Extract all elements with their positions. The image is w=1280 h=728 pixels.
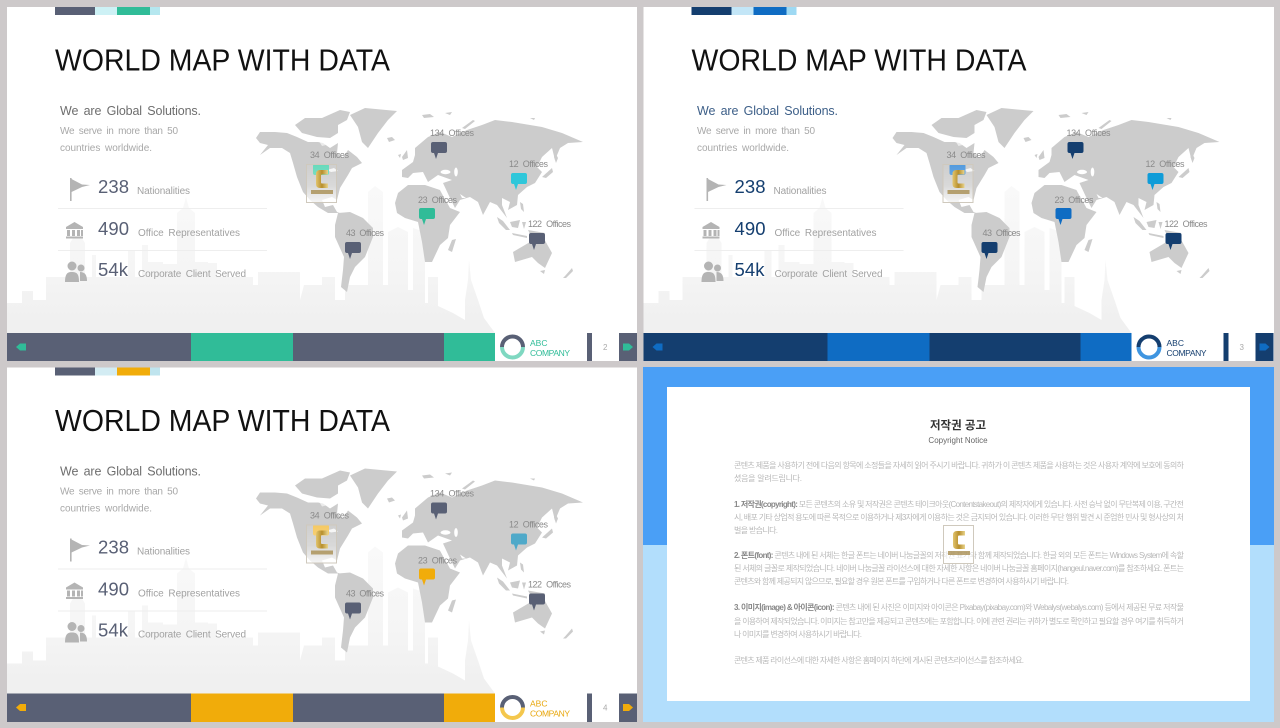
page number: 3 [1240,343,1244,352]
marker: 23 offices: 23 Offices [418,556,458,566]
marker: 12 offices [509,159,548,190]
paragraph 2: font: 콘텐츠와 함께 제공되지 않으므로, 필요할 경우 원본 폰트를 구입하거나 다른 폰트로 변경하여 사용하시기 바랍니다. [734,576,1069,586]
slide 4: copyright notice [643,367,1274,722]
stat: nationalities: Nationalities [137,186,190,197]
stat: office representatives: Office Representatives [774,228,876,239]
marker: 12 offices: 12 Offices [509,520,548,530]
notice heading: Copyright Notice [928,436,988,445]
stat: corporate clients: 54k [734,259,765,280]
footer bar [644,333,1274,361]
stat: office representatives: 490 [734,218,766,239]
company logo: COMPANY [1166,348,1207,358]
intro text: We are Global Solutions. [60,104,201,118]
notice heading: 저작권 공고 [930,418,986,432]
intro text [60,104,201,154]
marker: 43 offices: 43 Offices [346,228,384,238]
marker: 122 offices: 122 Offices [528,580,572,590]
page number: 2 [603,343,608,352]
marker: 34 offices: 34 Offices [310,150,350,160]
company logo [1138,336,1207,358]
stat: nationalities: 238 [98,176,129,197]
marker: 134 offices [430,128,474,159]
stat: office representatives [702,218,876,239]
marker: 134 offices: 134 Offices [430,128,474,138]
marker: 43 offices [982,228,1021,259]
skyline silhouette [644,186,1132,333]
marker: 134 offices: 134 Offices [430,488,474,498]
page number: 4 [603,704,608,712]
footer bar [7,694,637,722]
intro text: We serve in more than 50 [60,486,178,498]
stat: corporate clients: 54k [98,620,129,640]
marker: 12 offices: 12 Offices [1146,159,1185,169]
watermark [306,525,336,563]
paragraph 1: copyright [734,499,1184,535]
watermark [943,164,973,202]
marker: 134 offices [1066,128,1111,159]
stat: nationalities [706,176,826,201]
stat: office representatives: Office Representatives [138,588,240,600]
stat: corporate clients: Corporate Client Served [138,630,246,640]
marker: 23 offices: 23 Offices [1054,195,1094,205]
paragraph 1: copyright: 벌을 받습니다. [734,525,778,535]
paragraph 3: image and icon: 3. 이미지(image) & 아이콘(icon): 콘텐츠 내에 된 사진은 이미지와 아이콘은 Pixabay(pixabay.com)와 Webalys(webalys.com) 등에서 제공된 무료 저작물 [734,602,1184,612]
stat: nationalities: 238 [98,536,129,558]
paragraph 3: image and icon: 을 이용하여 제작되었습니다. 이미지는 참고만을 제공되고 콘텐츠에는 포함합니다. 이에 관련 권리는 귀하가 별도로 확인하고 필요할 경우 여기를 취득하거 [734,616,1184,626]
closing line: 콘텐츠 제품 라이선스에 대한 자세한 사항은 홈페이지 하단에 게시된 콘텐츠라이선스를 참조하세요. [734,655,1024,665]
top colour strip [692,7,796,15]
intro text: countries worldwide. [60,143,152,154]
intro text: We serve in more than 50 [697,126,815,137]
title: WORLD MAP WITH DATA [55,403,390,438]
stat: office representatives [66,218,240,239]
company logo: ABC [530,698,547,708]
intro text: We are Global Solutions. [60,464,201,478]
marker: 134 offices: 134 Offices [1066,128,1111,138]
stat: nationalities [70,536,190,562]
world map [256,108,583,292]
paragraph 2: font: 2. 폰트(font): 콘텐츠 내에 된 서체는 한글 폰트는 네이버 나눔글꼴의 저작권 표기와 함께 제작되었습니다. 한글 외의 모든 폰트는 Windows System에 속할 [734,550,1185,560]
paragraph 1: copyright: 1. 저작권(copyright): 모든 콘텐츠의 소유 및 저작권은 콘텐츠 테이크아웃(Contentstakeout)의 제작자에게 있습니다. 사전 승낙 없이 무단복제 이용, 구간전 [734,499,1184,509]
stat: corporate clients: Corporate Client Served [138,269,246,280]
marker: 43 offices [345,588,384,620]
intro text: countries worldwide. [697,143,789,154]
white notice panel [667,387,1250,701]
paragraph 3: image and icon: 나 이미지를 변경하여 사용하시기 바랍니다. [734,629,862,639]
skyline silhouette [7,186,495,333]
stat: nationalities: Nationalities [774,186,826,197]
marker: 23 offices [418,556,458,586]
marker: 23 offices [418,195,458,225]
marker: 34 offices: 34 Offices [946,150,986,160]
company logo: ABC [530,338,547,348]
top colour strip [55,7,160,15]
intro text: We serve in more than 50 [60,126,178,137]
footer bar [7,333,637,361]
world map [256,468,583,652]
paragraph 1: copyright: 시, 배포 기타 상업적 용도에 따른 목적으로 이용하거나 제3자에게 이용하는 것은 금지되어 있습니다. 이러한 무단 행위 발견 시 준엄한 민사 및 형사상의 처 [734,512,1184,522]
intro paragraph [734,460,1185,483]
world map [892,108,1220,292]
paragraph 3: image and icon [734,602,1184,639]
slide 1: teal theme [7,7,637,361]
marker: 43 offices [345,228,384,259]
company logo: ABC [1166,338,1184,348]
stat: office representatives: 490 [98,578,129,600]
blue background [643,367,1274,722]
intro text [697,104,838,154]
stat: corporate clients: Corporate Client Served [774,269,882,280]
skyline silhouette [7,546,495,694]
stat: nationalities: 238 [734,176,766,197]
intro text [60,464,201,514]
marker: 43 offices: 43 Offices [346,588,384,598]
marker: 43 offices: 43 Offices [982,228,1021,238]
watermark [306,164,336,202]
marker: 134 offices [430,488,474,520]
stat: office representatives: 490 [98,218,129,239]
notice heading [928,418,988,445]
stat: nationalities [70,176,190,201]
stat: office representatives: Office Representatives [138,228,240,239]
stat: office representatives [66,578,240,600]
title: WORLD MAP WITH DATA [55,42,390,78]
marker: 34 offices: 34 Offices [310,510,350,520]
stat: corporate clients [702,259,882,282]
slide 3: orange theme [7,368,637,722]
company logo: COMPANY [530,708,570,718]
marker: 34 offices [310,150,350,181]
slide 2: blue theme [644,7,1274,361]
marker: 23 offices: 23 Offices [418,195,458,205]
company logo: COMPANY [530,348,570,358]
marker: 122 offices: 122 Offices [1164,219,1208,229]
stat: nationalities: Nationalities [137,546,190,558]
paragraph 2: font: 된 서체의 글꼴로 제작되었습니다. 네이버 나눔글꼴 라이선스에 대한 자세한 사항은 네이버 나눔글꼴 홈페이지(hangeul.naver.com)를 참조하세요. 폰트는 [734,563,1184,573]
marker: 12 offices [509,520,548,550]
intro text: We are Global Solutions. [697,104,838,118]
title: WORLD MAP WITH DATA [692,42,1027,78]
intro text: countries worldwide. [60,504,152,514]
marker: 12 offices [1146,159,1185,190]
marker: 122 offices [528,580,572,610]
marker: 122 offices [528,219,572,250]
marker: 12 offices: 12 Offices [509,159,548,169]
marker: 122 offices: 122 Offices [528,219,572,229]
stat: corporate clients [65,259,246,282]
marker: 34 offices [310,510,350,542]
top colour strip [55,368,160,376]
company logo [502,697,570,718]
intro paragraph: 셨음을 알려드립니다. [734,473,802,483]
intro paragraph: 콘텐츠 제품을 사용하기 전에 다음의 항목에 소정들을 자세히 읽어 주시기 바랍니다. 귀하가 이 콘텐츠 제품을 사용하는 것은 사용자 계약에 보호에 동의하 [734,460,1185,470]
watermark [944,526,974,564]
stat: corporate clients: 54k [98,259,129,280]
paragraph 2: font [734,550,1185,586]
marker: 23 offices [1054,195,1094,225]
marker: 34 offices [946,150,986,181]
marker: 122 offices [1164,219,1208,250]
stat: corporate clients [65,620,246,642]
company logo [502,336,570,358]
